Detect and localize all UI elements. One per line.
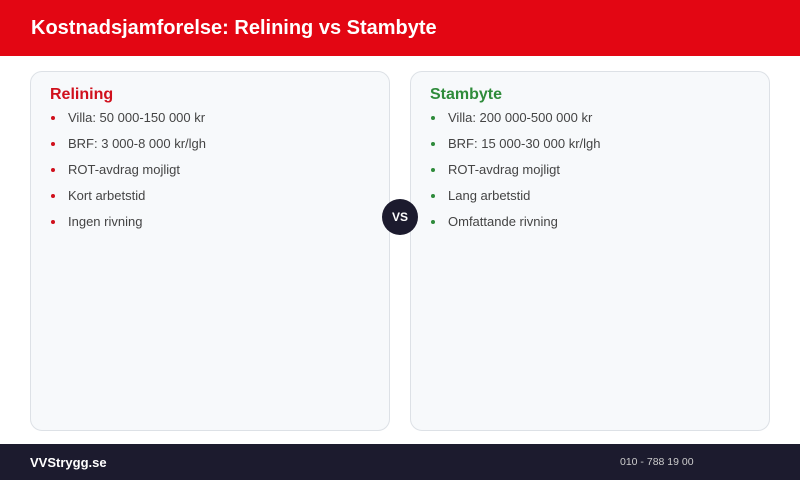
list: relining points: BRF: 3 000-8 000 kr/lgh [68,136,206,151]
footer [0,444,800,480]
list: stambyte points: BRF: 15 000-30 000 kr/lgh [448,136,600,151]
footer: VVStrygg.se [30,455,107,470]
list: stambyte points: ROT-avdrag mojligt [448,162,560,177]
heading: relining: Relining [50,86,113,103]
title [0,0,800,56]
vs badge: VS [392,210,408,224]
list: stambyte points: Villa: 200 000-500 000 kr [448,110,592,125]
vs badge [382,199,418,235]
footer: 010 - 788 19 00 [620,456,694,468]
list: relining points: Ingen rivning [68,214,142,229]
title: Kostnadsjamforelse: Relining vs Stambyte [31,17,437,39]
list: relining points: Villa: 50 000-150 000 kr [68,110,205,125]
list: stambyte points: Lang arbetstid [448,188,530,203]
panel: relining [30,71,390,431]
heading: stambyte: Stambyte [430,86,502,103]
list: stambyte points [431,110,600,229]
list: relining points: Kort arbetstid [68,188,145,203]
list: relining points [51,110,206,229]
list: stambyte points: Omfattande rivning [448,214,558,229]
list: relining points: ROT-avdrag mojligt [68,162,180,177]
panel: stambyte [410,71,770,431]
